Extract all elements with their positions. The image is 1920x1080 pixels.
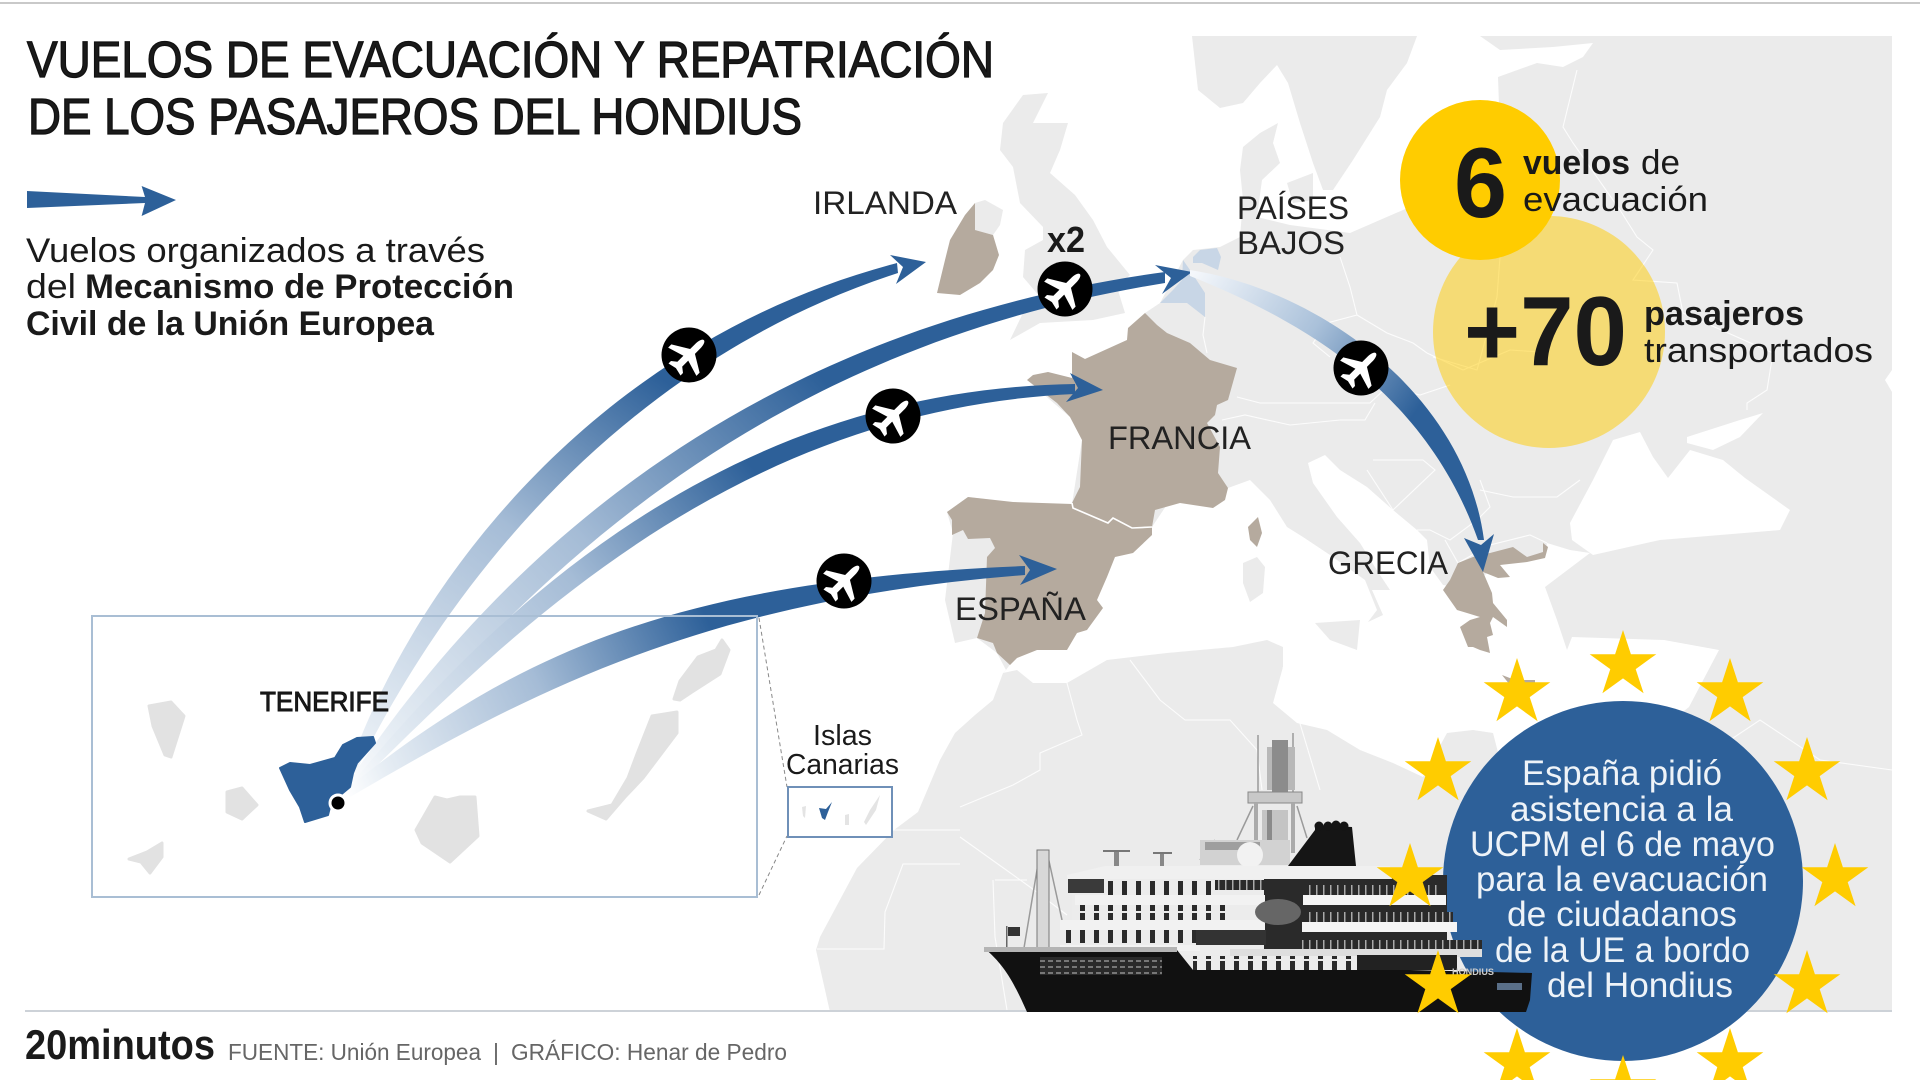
flight arc: Países Bajos to Grecia [1190,270,1494,572]
highlighted country: España [947,497,1152,665]
footer: logo: 20minutos [25,1021,215,1068]
plane marker: España route [815,552,873,610]
plane marker: Francia route [864,387,922,445]
footer: source: GRÁFICO: Henar de Pedro [511,1039,787,1065]
island: El Hierro [129,843,162,873]
callout text: del Hondius [1547,966,1733,1005]
label: Grecia: GRECIA [1328,545,1449,581]
stat: 6 vuelos de evacuación: de [1641,144,1680,182]
callout text: UCPM el 6 de mayo [1470,825,1775,864]
highlighted country: Países Bajos [1160,248,1221,317]
plane marker: Grecia route [1332,339,1390,397]
inset: Canary Islands map [92,616,757,897]
callout text: para la evacuación [1476,860,1768,899]
callout text: asistencia a la [1510,790,1734,829]
island: La Palma [149,702,184,757]
label: Irlanda: IRLANDA [813,185,958,221]
callout text: de ciudadanos [1507,895,1737,934]
funnel [1288,820,1356,866]
balcony decks [1303,895,1446,905]
stat: +70 pasajeros transportados: pasajeros [1644,295,1804,333]
stat: 6 vuelos de evacuación: vuelos [1523,144,1630,182]
legend arrow [27,186,176,216]
EU stars ring [1377,630,1868,1080]
label: Islas Canarias: Canarias [786,749,899,781]
title: VUELOS DE EVACUACIÓN Y REPATRIACIÓN [27,31,994,88]
label: Islas Canarias [786,720,899,781]
label: España: ESPAÑA [955,591,1087,627]
label: Tenerife: TENERIFE [260,686,389,717]
ship: Hondius [984,733,1532,1012]
footer: source: | [493,1039,499,1065]
blue callout circle [1443,701,1803,1061]
Corsica [1248,517,1262,547]
label: Francia: FRANCIA [1108,420,1252,456]
title [27,31,994,145]
label: x2: x2 [1047,219,1085,260]
stat: +70 pasajeros transportados [1464,276,1873,386]
callout text [1470,754,1775,1005]
flight arc: Tenerife to España [345,555,1057,797]
flight arc: Tenerife to Irlanda [340,255,926,797]
locator connector lines [759,618,787,895]
label: Países Bajos [1237,190,1349,261]
legend text [26,232,514,343]
plane marker: Irlanda route [660,326,718,384]
label: Países Bajos: BAJOS [1237,225,1345,261]
island: Gran Canaria [416,797,478,862]
legend text: Vuelos organizados a través [26,232,485,270]
footer: source [228,1039,787,1065]
lifeboat [1255,899,1301,925]
legend text: Mecanismo de Protección [85,268,514,306]
plane marker: Países Bajos route [1036,260,1094,318]
legend text: Civil de la Unión Europea [26,305,435,343]
highlighted country: Irlanda [937,203,999,295]
yellow circle: passengers [1433,216,1665,448]
airport marker [328,794,348,812]
footer rule [25,1010,1892,1012]
stat: +70 pasajeros transportados: transportados [1644,332,1873,370]
upper deck equipment [1200,840,1290,865]
callout text: de la UE a bordo [1495,931,1750,970]
hull name: HONDIUS [1452,967,1494,977]
footer: source: FUENTE: Unión Europea [228,1039,481,1065]
island: La Gomera [227,788,257,819]
radar mast [1267,747,1295,790]
label: Islas Canarias: Islas [813,720,872,752]
stat: 6 vuelos de evacuación [1454,127,1708,238]
superstructure [1263,875,1447,959]
top rule [0,2,1920,4]
island: Lanzarote [674,640,729,700]
legend text: del [26,268,76,306]
yellow circle: flights [1400,100,1560,260]
flight arc: Tenerife to Francia [342,373,1103,797]
callout text: España pidió [1522,754,1722,793]
highlighted country: Francia [1027,313,1237,528]
highlighted country: Grecia [1443,543,1548,685]
title: DE LOS PASAJEROS DEL HONDIUS [28,88,802,145]
flight arc: Tenerife to Países Bajos [340,265,1192,797]
island: Tenerife [280,737,375,822]
background map of Europe and North Africa [816,36,1892,1012]
label: Países Bajos: PAÍSES [1237,190,1349,226]
island: Fuerteventura [588,712,677,819]
stat: 6 vuelos de evacuación: 6 [1454,127,1507,238]
stat: +70 pasajeros transportados: +70 [1464,276,1627,386]
locator box [788,787,892,837]
ship masts and rigging [1024,733,1307,948]
hull [984,948,1532,1012]
stat: 6 vuelos de evacuación: evacuación [1523,181,1708,219]
